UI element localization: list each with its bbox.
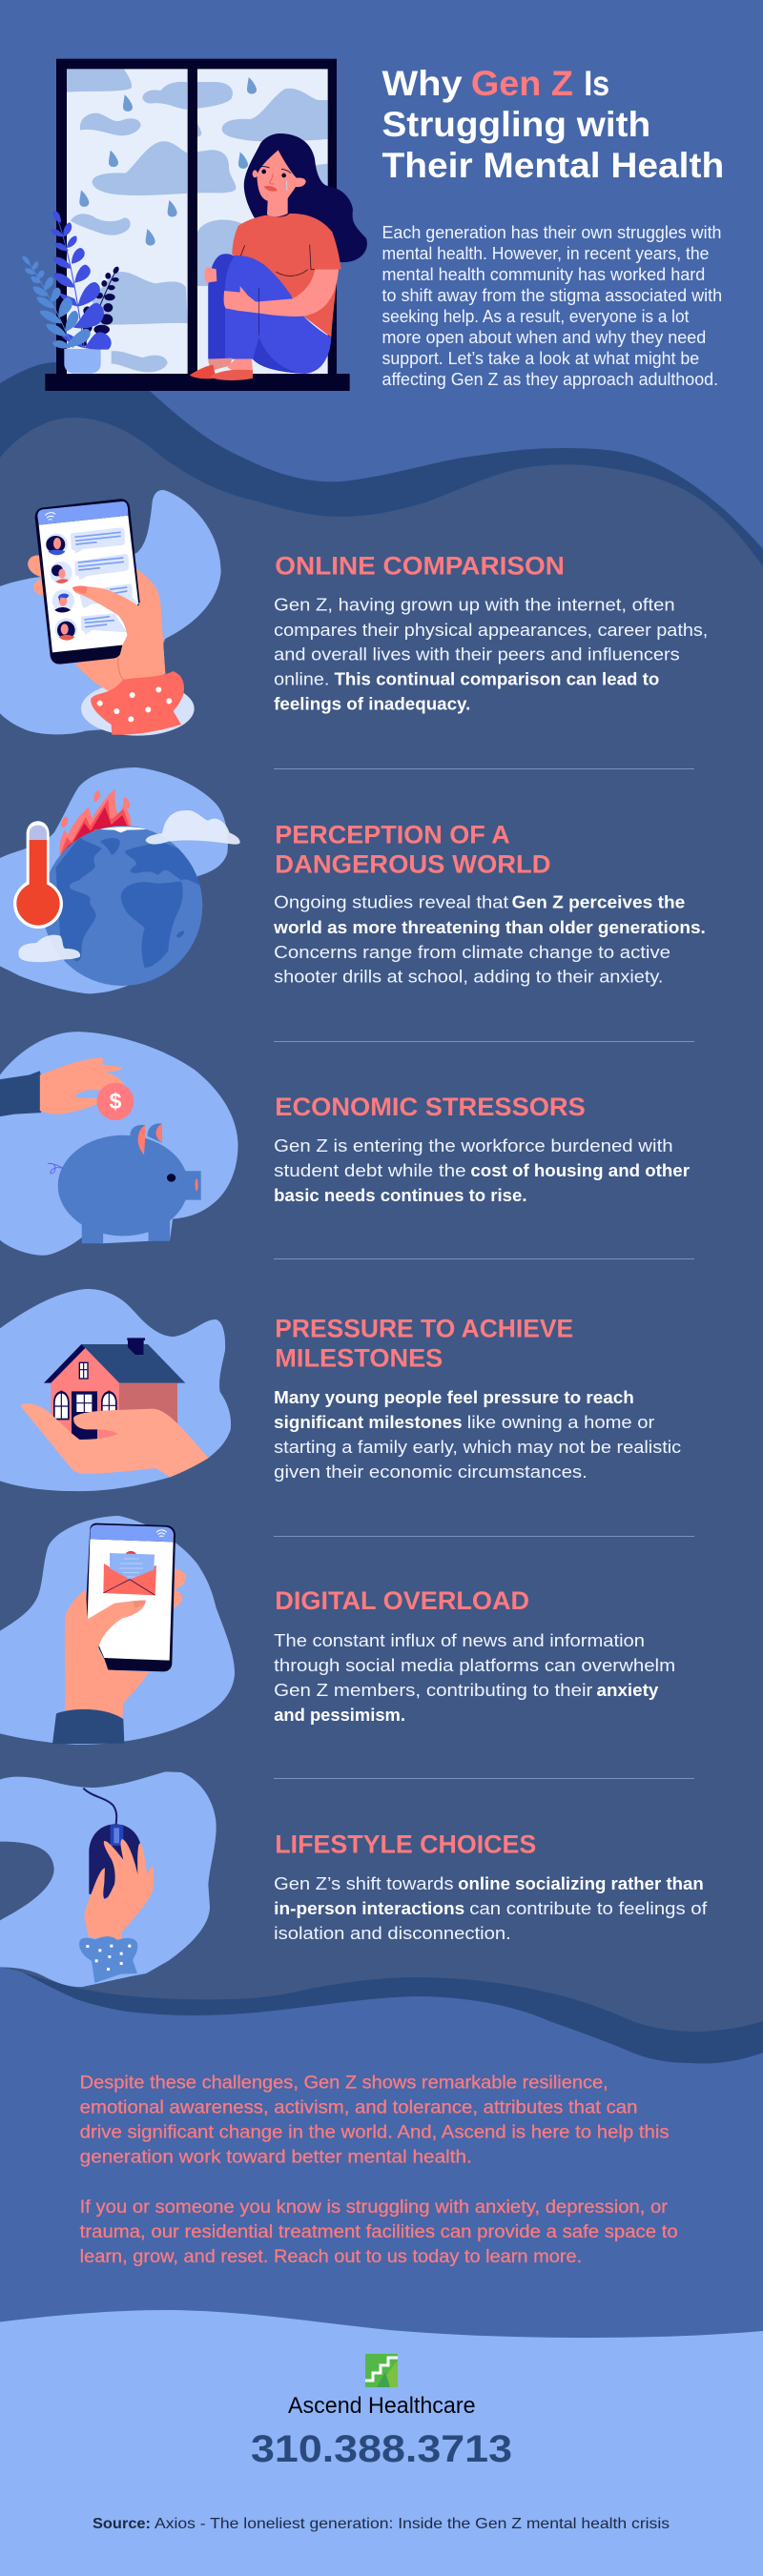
intro paragraph: to shift away from the stigma associated with <box>382 286 722 305</box>
pig ears <box>138 1124 162 1155</box>
intro paragraph: support. Let’s take a look at what might be <box>382 349 699 368</box>
blob <box>0 490 221 734</box>
envelope <box>103 1551 156 1595</box>
intro paragraph: mental health community has worked hard <box>382 265 705 284</box>
footer wave <box>0 2310 763 2576</box>
house side wall <box>119 1383 177 1424</box>
body text <box>274 1873 708 1943</box>
background: dark wave band <box>0 362 763 2064</box>
window panes <box>67 69 328 374</box>
closing message: drive significant change in the world. And, Ascend is here to help this <box>80 2122 670 2143</box>
body text <box>274 595 708 714</box>
phone <box>85 1523 175 1671</box>
woman body <box>204 214 341 374</box>
heading: PERCEPTION OF A <box>275 821 510 849</box>
body layer <box>22 211 350 391</box>
phone <box>35 499 140 664</box>
body text: online. <box>274 669 329 689</box>
body text: cost of housing and other <box>470 1160 690 1180</box>
body text <box>274 1135 690 1205</box>
body text: isolation and disconnection. <box>274 1923 511 1943</box>
body text: significant milestones <box>274 1412 463 1432</box>
snow cap <box>100 827 147 832</box>
windows and door <box>53 1362 118 1440</box>
body text: Ongoing studies reveal that <box>274 892 508 911</box>
closing message <box>80 2073 678 2267</box>
intro paragraph <box>382 223 722 389</box>
pig eye and snout <box>167 1174 175 1182</box>
blob <box>0 767 228 993</box>
window sill <box>45 374 350 391</box>
closing message: emotional awareness, activism, and tolerance, attributes that can <box>80 2097 637 2118</box>
hand <box>65 1589 150 1718</box>
chimney <box>127 1338 145 1355</box>
body text: basic needs continues to rise. <box>274 1185 526 1205</box>
background: middle slate region <box>0 418 763 2032</box>
body text: Gen Z, having grown up with the internet, often <box>274 595 675 615</box>
body text: anxiety <box>597 1680 659 1700</box>
intro paragraph: seeking help. As a result, everyone is a lot <box>382 307 689 326</box>
intro paragraph: mental health. However, in recent years, the <box>382 244 709 263</box>
source: Axios - The loneliest generation: Inside the Gen Z mental health crisis <box>155 2516 670 2532</box>
heading <box>275 1314 573 1373</box>
hand <box>21 1403 208 1477</box>
title: Why <box>382 64 463 103</box>
body text <box>274 1387 681 1482</box>
body text <box>273 892 706 987</box>
title: Their Mental Health <box>382 146 724 185</box>
body text: starting a family early, which may not be realistic <box>274 1437 681 1457</box>
heading: MILESTONES <box>275 1344 443 1373</box>
intro paragraph: Each generation has their own struggles with <box>382 223 721 242</box>
logo wordmark: Ascend Healthcare <box>288 2393 475 2419</box>
sleeve <box>52 1709 124 1744</box>
heading: ONLINE COMPARISON <box>275 551 565 580</box>
palm <box>74 569 165 693</box>
hand <box>40 1058 124 1114</box>
hand <box>84 1839 154 1939</box>
heading <box>275 821 551 879</box>
body text: shooter drills at school, adding to their anxiety. <box>274 967 663 987</box>
body text: Gen Z’s shift towards <box>274 1873 454 1893</box>
illustration: piggy bank and coin <box>0 1032 238 1256</box>
heading: PRESSURE TO ACHIEVE <box>275 1314 573 1342</box>
closing message: Despite these challenges, Gen Z shows remarkable resilience, <box>80 2073 608 2094</box>
face <box>253 150 306 216</box>
closing message: trauma, our residential treatment facilities can provide a safe space to <box>80 2222 678 2242</box>
panel: lifestyle choices <box>0 1771 708 1987</box>
intro paragraph: affecting Gen Z as they approach adulthood. <box>382 370 718 389</box>
illustration: hand on mouse <box>0 1771 217 1987</box>
blob <box>0 1771 217 1987</box>
blob <box>0 1516 235 1745</box>
panel: pressure to achieve milestones <box>0 1289 681 1491</box>
title: Gen Z <box>471 64 573 103</box>
body text: and overall lives with their peers and influencers <box>274 644 680 664</box>
sleeve <box>79 1936 137 1983</box>
house front <box>51 1348 119 1435</box>
illustration: hand holding phone <box>0 490 221 736</box>
window frame <box>56 59 337 374</box>
icon: Ascend logo stairs <box>365 2354 398 2387</box>
body text: online socializing rather than <box>458 1873 704 1893</box>
illustration: phone with envelope <box>0 1516 235 1745</box>
closing message: learn, grow, and reset. Reach out to us today to learn more. <box>80 2247 582 2267</box>
thermometer <box>13 821 63 929</box>
window and face layer <box>56 59 367 374</box>
heading: LIFESTYLE CHOICES <box>275 1830 536 1859</box>
heading: ECONOMIC STRESSORS <box>275 1093 586 1121</box>
globe <box>42 826 202 986</box>
body text: given their economic circumstances. <box>274 1462 588 1482</box>
flames <box>59 788 132 855</box>
plant in pot <box>22 211 120 374</box>
title <box>382 64 724 185</box>
body text: Gen Z members, contributing to their <box>274 1680 592 1700</box>
body text: in-person interactions <box>274 1898 464 1918</box>
gable edge <box>44 1344 85 1383</box>
body text: and pessimism. <box>274 1705 405 1725</box>
heading: DANGEROUS WORLD <box>275 850 551 879</box>
body text: Gen Z is entering the workforce burdened with <box>274 1135 673 1155</box>
phone number: 310.388.3713 <box>251 2428 512 2470</box>
roof <box>81 1344 185 1383</box>
title: Is <box>584 64 609 103</box>
fingers <box>28 556 45 596</box>
body text: world as more threatening than older generations. <box>273 917 706 937</box>
body text: can contribute to feelings of <box>469 1898 708 1918</box>
mouse <box>89 1824 141 1899</box>
body text: compares their physical appearances, career paths, <box>274 620 708 640</box>
coin <box>97 1083 134 1120</box>
body text: like owning a home or <box>467 1412 654 1432</box>
pig tail <box>48 1163 63 1174</box>
illustration: woman at rainy window <box>22 59 367 391</box>
polka cuff <box>91 671 184 735</box>
illustration: house in hand <box>0 1289 231 1491</box>
intro paragraph: more open about when and why they need <box>382 328 706 347</box>
mouse cord <box>83 1789 116 1824</box>
closing message: If you or someone you know is struggling with anxiety, depression, or <box>80 2198 669 2218</box>
body text: Concerns range from climate change to active <box>274 942 670 962</box>
blob <box>0 1289 231 1491</box>
body text: student debt while the <box>274 1160 466 1180</box>
panel: economic stressors <box>0 1032 690 1256</box>
body text: Gen Z perceives the <box>512 892 685 911</box>
body text: This continual comparison can lead to <box>334 669 659 689</box>
body text: through social media platforms can overwhelm <box>274 1655 675 1675</box>
closing message: generation work toward better mental health. <box>80 2147 472 2168</box>
cuff shadow <box>81 682 195 736</box>
body text: Many young people feel pressure to reach <box>274 1387 634 1407</box>
panel: hero <box>22 59 724 391</box>
panel: online comparison <box>0 490 708 736</box>
illustration: burning globe and thermometer <box>0 767 240 993</box>
blob <box>0 1032 238 1256</box>
thumb and hand <box>72 586 165 693</box>
panel: dangerous world <box>0 767 706 993</box>
body text <box>274 1630 675 1725</box>
panel: digital overload <box>0 1516 675 1745</box>
sleeve <box>0 1071 43 1116</box>
avatars <box>46 536 75 641</box>
clouds <box>146 810 240 845</box>
hair <box>244 133 367 262</box>
body text: The constant influx of news and information <box>274 1630 645 1650</box>
body text: feelings of inadequacy. <box>274 694 470 714</box>
title: Struggling with <box>382 105 650 144</box>
continents <box>55 837 200 968</box>
rain clouds and drops <box>67 69 328 372</box>
dollar sign: $ <box>110 1089 122 1114</box>
fingers behind phone <box>174 1569 186 1607</box>
source: Source: <box>93 2516 151 2532</box>
pig body <box>58 1123 201 1243</box>
shoes <box>190 365 253 380</box>
heading: DIGITAL OVERLOAD <box>275 1586 529 1615</box>
footer panel <box>0 2310 763 2576</box>
